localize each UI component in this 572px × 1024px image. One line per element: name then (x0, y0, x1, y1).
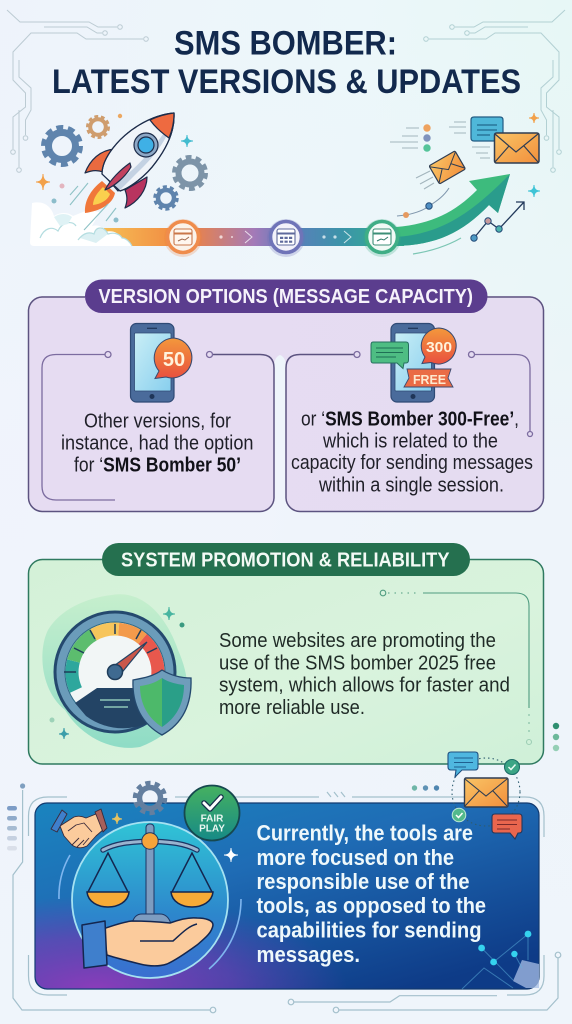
icon: phone with 50 badge: 50 (163, 349, 185, 371)
text: reliability body (219, 630, 510, 719)
icon: large envelope (472, 133, 539, 163)
icon: trend line (471, 202, 524, 241)
panel: version options (28, 280, 544, 512)
text: version 50: Other versions, for (84, 410, 231, 432)
circuit decoration: top left (7, 10, 148, 172)
text: reliability body: more reliable use. (219, 697, 365, 719)
text: version 50: for ‘SMS Bomber 50’ (74, 454, 241, 476)
icon: purple calendar milestone (267, 219, 305, 257)
icon: sparkles (112, 813, 238, 862)
text: responsible use body: Currently, the tools are (256, 821, 473, 846)
panel: responsible use (35, 784, 539, 989)
text: version 300 free (291, 408, 533, 496)
timeline bar (104, 228, 404, 246)
heading: system promotion: SYSTEM PROMOTION & RELIABILITY (121, 550, 450, 572)
text: responsible use body: tools, as opposed to the (256, 893, 486, 918)
text: reliability body: system, which allows for faster and (219, 674, 510, 696)
heading: version options (85, 280, 488, 313)
icon: message dots (390, 124, 431, 152)
icon: orange calendar milestone (164, 219, 202, 257)
icon: phone with 50 badge (130, 324, 192, 402)
text: version 300 free: which is related to the (322, 430, 498, 452)
icon: fair play badge: PLAY (199, 824, 225, 834)
circuit frame around responsible use panel (13, 790, 561, 1013)
text: version 300 free: within a single session. (318, 474, 504, 496)
circuit lines inside version cards (42, 352, 532, 500)
icon: clouds (30, 202, 132, 246)
text: responsible use body (256, 821, 486, 967)
icon: phone with 300 free badge: 300 (426, 339, 452, 356)
text: reliability body: use of the SMS bomber 2025 free (219, 652, 496, 674)
text: responsible use body: messages. (256, 942, 360, 967)
heading: system promotion (102, 543, 470, 576)
text: reliability body: Some websites are promoting the (219, 630, 496, 652)
icon: handshake (51, 809, 107, 848)
icon: messaging cluster (448, 752, 522, 839)
icon: fair play badge: FAIR (201, 814, 224, 824)
text: version 50 (61, 410, 254, 476)
title: LATEST VERSIONS & UPDATES (52, 63, 521, 101)
circuit line inside reliability panel (380, 590, 532, 744)
icon: phone with 300 free badge (371, 324, 456, 402)
network decoration (462, 931, 539, 989)
icon: rocket (85, 113, 174, 213)
heading: version options: VERSION OPTIONS (MESSAGE CAPACITY) (98, 286, 473, 308)
text: responsible use body: responsible use of the (256, 869, 470, 894)
text: version 50: instance, had the option (61, 432, 254, 454)
icon: fair play badge (184, 786, 240, 840)
icon: header stars (528, 113, 540, 197)
icon: speedometer with shield (42, 594, 191, 748)
icon: phone with 300 free badge: FREE (413, 372, 446, 387)
text: version 300 free: capacity for sending messages (291, 452, 533, 474)
icon: small trend curve (397, 188, 449, 218)
text: responsible use body: more focused on the (256, 845, 454, 870)
circuit decoration: top right (424, 10, 565, 172)
decorative side pills and dots (7, 783, 439, 850)
title (52, 24, 521, 101)
text: responsible use body: capabilities for sending (256, 918, 482, 943)
icon: note bubble (449, 117, 503, 141)
text: version 300 free: or ‘SMS Bomber 300-Free’, (301, 408, 519, 430)
icon: gear (136, 784, 164, 812)
panel: system promotion and reliability (28, 543, 544, 764)
icon: gears (44, 117, 205, 208)
icon: rocket sparkles and speed lines (36, 114, 193, 230)
icon: small flying envelope (416, 151, 465, 189)
icon: growth arrow (396, 174, 510, 254)
icon: green calendar milestone (363, 219, 401, 257)
title: SMS BOMBER: (174, 24, 397, 62)
icon: balance scale on open hand (59, 822, 241, 978)
decorative side dots (553, 723, 559, 751)
